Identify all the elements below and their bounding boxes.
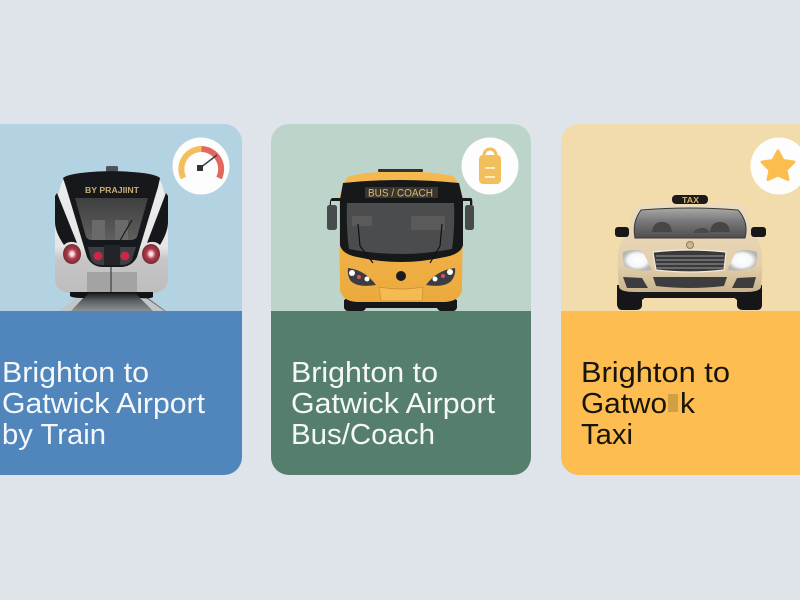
icon: luggage tag [462,138,518,194]
heading: taxi: k [680,388,696,420]
heading: bus: Gatwick Airport [291,388,495,420]
heading: taxi: Taxi [581,419,633,451]
heading: train: Brighton to [2,357,149,389]
heading: train: Gatwick Airport [2,388,205,420]
heading: taxi [581,357,730,451]
icon: speedometer [172,138,230,194]
heading: taxi: Gatwo [581,388,667,420]
panel: bus card [271,124,531,475]
heading: train: by Train [2,419,106,451]
icon: star [750,138,800,194]
sign: taxi roof light [672,195,708,205]
sign: taxi roof light: TAX [682,196,700,205]
heading: bus [291,357,495,451]
sign: destination display: BY PRAJIINT [85,186,139,195]
heading: train [2,357,205,451]
heading: bus: Bus/Coach [291,419,435,451]
heading: taxi: Brighton to [581,357,730,389]
panel: taxi card [561,124,800,475]
illustration: bus front [327,169,474,311]
illustration: train front [55,166,168,311]
panel: train card [0,124,242,475]
sign: destination display: BUS / COACH [368,188,433,200]
illustration: taxi front [615,195,766,310]
heading: bus: Brighton to [291,357,438,389]
